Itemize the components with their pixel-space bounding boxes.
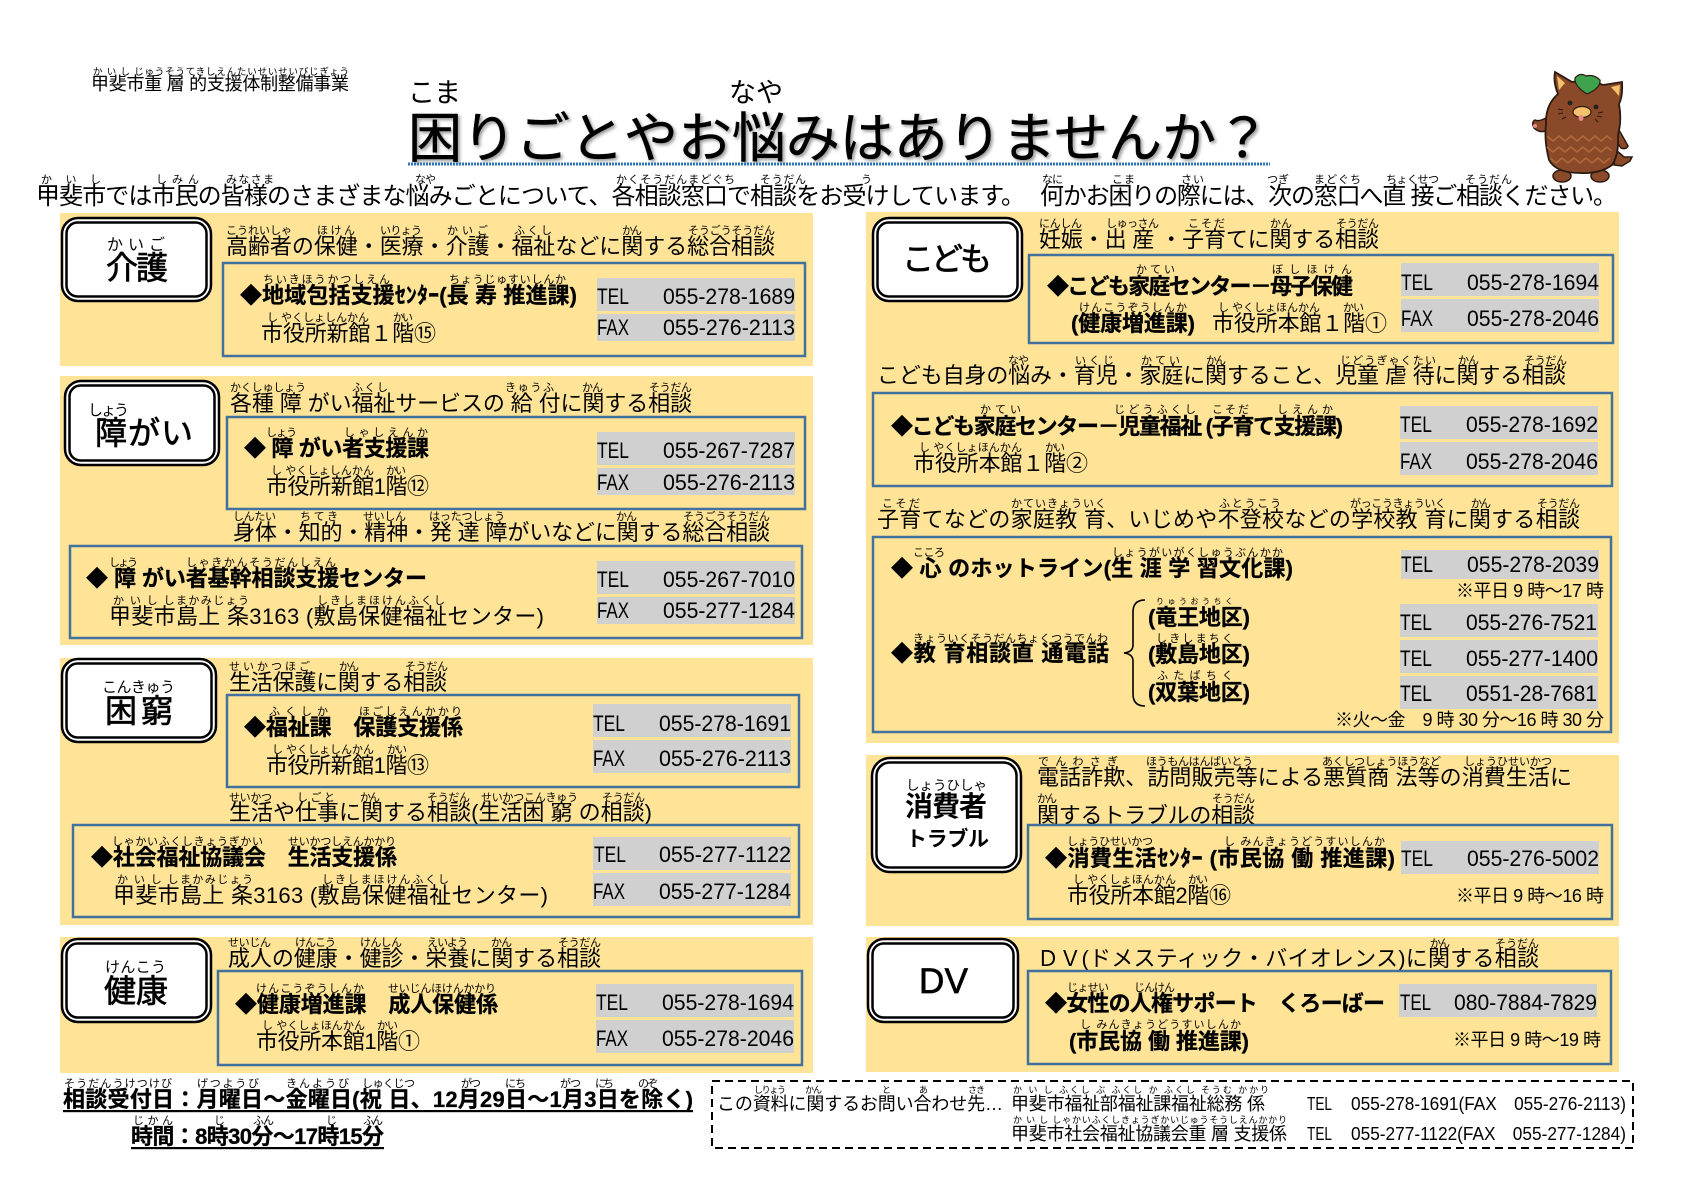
heading: 生活や仕事: せいかつこんきゅう: [481, 791, 578, 804]
box: 障がい者支援課: し やくしょしんかん: [271, 464, 374, 477]
box: 地域包括支援センター: かい: [393, 311, 413, 324]
box: こども家庭センター 児童福祉: TEL: [1400, 412, 1432, 437]
box: 障がい者支援課: TEL: [597, 438, 629, 463]
heading: DV description: そうだん: [1495, 937, 1539, 950]
heading: こども自身の悩み: かん: [1206, 354, 1226, 367]
inquiry box: あ: [919, 1085, 928, 1095]
box: 障がい者基幹相談支援センター: しゃきかんそうだんしえん: [186, 556, 336, 569]
heading: 障がい福祉サービス: 各種 障 がい福祉サービスの 給 付に関する相談: [230, 391, 692, 416]
heading: 介護 description: いりょう: [380, 224, 422, 237]
box: 障がい者基幹相談支援センター: 055-267-7010: [663, 567, 795, 592]
heading: 総合相談: しんたい: [233, 510, 276, 523]
box: 心のホットライン・教育相談直通電話: りゅうおうちく: [1156, 597, 1233, 606]
inquiry box: さき: [968, 1085, 985, 1095]
intro text: なに: [1042, 173, 1063, 186]
heading: こども自身の悩み: なや: [1008, 354, 1029, 367]
heading: 生活や仕事: しごと: [297, 790, 335, 804]
inquiry box: しりょう: [754, 1085, 786, 1095]
intro text: つぎ: [1267, 172, 1289, 186]
heading: DV description: かん: [1430, 937, 1450, 950]
box: 消費生活センター: ◆消費生活ｾﾝﾀｰ (市民協 働 推進課): [1045, 846, 1395, 871]
box: 心のホットライン・教育相談直通電話: (敷島地区): [1148, 642, 1250, 667]
box: 福祉課 保護支援係: 市役所新館1階⑬: [266, 753, 429, 778]
heading: 子育てなどの家庭教育: 子育てなどの家庭教 育、いじめや不登校などの学校教 育に関する相談: [877, 507, 1580, 532]
label: DV: [868, 939, 1018, 1022]
heading: 子育てなどの家庭教育: こそだ: [882, 497, 920, 510]
intro text: みなさま: [226, 173, 274, 186]
box: 消費生活センター: TEL: [1401, 846, 1433, 871]
box: こども家庭センター 児童福祉: FAX: [1400, 449, 1432, 474]
box: こども家庭センター 児童福祉: [873, 393, 1612, 486]
heading: 妊娠・出産: 妊娠・出 産 ・子育てに関する相談: [1039, 227, 1379, 252]
intro text: さい: [1181, 173, 1204, 186]
heading: 子育てなどの家庭教育: かん: [1471, 497, 1491, 510]
label: 困窮: こんきゅう: [102, 679, 175, 696]
box: こども家庭センター 母子保健: (健康増進課): [1071, 311, 1195, 336]
box: 障がい者支援課: 市役所新館1階⑫: [266, 474, 429, 499]
heading: 総合相談: [233, 509, 770, 545]
box: 地域包括支援センター: ちょうじゅすいしんか: [449, 273, 566, 286]
box: 障がい者基幹相談支援センター: FAX: [597, 598, 629, 623]
box: 障がい者支援課: かい: [386, 464, 406, 477]
box: 健康増進課 成人保健係: し やくしょほんかん: [262, 1019, 365, 1032]
icon: mascot: [1533, 72, 1632, 182]
box: 福祉課 保護支援係: TEL: [593, 711, 625, 736]
intro text: かくそうだんまどぐち: [616, 173, 735, 186]
label: こども: [873, 218, 1022, 301]
heading: 介護 description: 高齢者の保健・医療・介護・福祉などに関する総合相談: [226, 234, 775, 259]
intro text: まどぐち: [1314, 173, 1361, 186]
box: 心のホットライン・教育相談直通電話: ◆教 育相談直 通電話: [891, 641, 1109, 666]
reception days and hours: 相談受付日：月曜日～金曜日(祝 日、12月29日～1月3日を除く): [63, 1087, 693, 1112]
box: 障がい者支援課: 055-276-2113: [663, 470, 795, 495]
inquiry box: この資料に関するお問い合わせ先…: [717, 1094, 1003, 1114]
heading: 生活保護: そうだん: [405, 660, 448, 673]
intro text: [36, 172, 1617, 210]
panel: 健康: [60, 936, 813, 1073]
label: 健康: けんこう: [105, 959, 166, 976]
heading: 成人の健康: けんこう: [295, 936, 336, 949]
box: こども家庭センター 児童福祉: しえんか: [1277, 403, 1333, 416]
project name: 甲斐市重 層 的支援体制整備事業: [91, 74, 349, 94]
inquiry box: 甲斐市社会福祉協議会重 層 支援係: [1011, 1124, 1287, 1144]
box: 女性の人権サポート: ◆女性の人権サポート くろーばー: [1045, 991, 1385, 1016]
box: 健康増進課 成人保健係: TEL: [596, 990, 628, 1015]
box: 福祉課 保護支援係: ◆福祉課 保護支援係: [244, 715, 463, 740]
heading: 子育てなどの家庭教育: ふとうこう: [1219, 497, 1281, 510]
box: こども家庭センター 児童福祉: じどうふくし: [1114, 403, 1196, 416]
box: こども家庭センター 児童福祉: 055-278-2046: [1466, 449, 1598, 474]
box: 社会福祉協議会 生活支援係: 055-277-1122: [659, 842, 791, 867]
title: なや: [729, 78, 783, 108]
box: 女性の人権サポート: [1028, 971, 1611, 1064]
heading: 総合相談: 身体・知的・精神・発 達 障がいなどに関する総合相談: [233, 520, 770, 545]
box: 女性の人権サポート: 080-7884-7829: [1454, 990, 1597, 1015]
intro text: う: [861, 173, 872, 186]
box: 心のホットライン・教育相談直通電話: (竜王地区): [1148, 605, 1250, 630]
heading: 生活保護: せいかつほご: [229, 659, 310, 673]
label: 障がい: しょう: [88, 402, 129, 419]
box: 消費生活センター: かい: [1188, 873, 1208, 886]
inquiry box: 055-278-1691(FAX 055-276-2113): [1351, 1094, 1626, 1114]
heading: 介護 description: ほけん: [317, 224, 355, 237]
intro text: か い し: [41, 173, 101, 186]
box: 福祉課 保護支援係: 055-278-1691: [659, 711, 791, 736]
heading: 生活や仕事: かん: [360, 791, 380, 804]
heading: こども自身の悩み: かん: [1458, 354, 1479, 367]
box: 女性の人権サポート: じょせい: [1067, 981, 1109, 994]
label: 介護: かいご: [107, 236, 165, 254]
box: 障がい者基幹相談支援センター: 055-277-1284: [663, 598, 795, 623]
box: 地域包括支援センター: 055-276-2113: [663, 315, 795, 340]
box: 健康増進課 成人保健係: せいじんほけんかかり: [388, 982, 496, 995]
box: こども家庭センター 母子保健: ぼしほけん: [1272, 263, 1352, 276]
box: 健康増進課 成人保健係: けんこうぞうしんか: [256, 982, 364, 995]
reception days and hours: きんようび: [286, 1077, 349, 1090]
heading: 総合相談: ちてき: [300, 510, 338, 523]
box: こども家庭センター 母子保健: ◆こども家庭センター－母子保健: [1047, 274, 1353, 299]
box: こども家庭センター 母子保健: 055-278-1694: [1467, 270, 1599, 295]
box: こども家庭センター 母子保健: 055-278-2046: [1467, 306, 1599, 331]
panel: こども: [866, 212, 1619, 743]
heading: 介護 description: こうれいしゃ: [226, 224, 292, 237]
box: 福祉課 保護支援係: し やくしょしんかん: [272, 743, 374, 756]
heading: 悪質商法: そうだん: [1212, 792, 1255, 805]
inquiry box: TEL: [1307, 1094, 1332, 1114]
heading: 妊娠・出産: しゅっさん: [1106, 217, 1159, 230]
project name: か い し じゅうそうてきしえんたいせいせいびじぎょう: [93, 66, 349, 78]
box: 社会福祉協議会 生活支援係: しゃかいふくしきょうぎかい: [112, 834, 263, 848]
intro text: し み ん: [156, 173, 199, 186]
label: 障がい: 障がい: [95, 415, 193, 451]
panel: DV: [866, 937, 1619, 1072]
heading: 悪質商法: 関するトラブルの相談: [1037, 803, 1255, 828]
heading: 介護 description: かん: [622, 224, 642, 237]
box: こども家庭センター 児童福祉: こそだ: [1212, 403, 1249, 416]
heading: 妊娠・出産: かん: [1270, 217, 1292, 230]
heading: 悪質商法: でんわさぎ: [1038, 754, 1118, 768]
reception days and hours: じ: [214, 1114, 225, 1127]
box: 女性の人権サポート: ※平日 9 時～19 時: [1453, 1030, 1601, 1050]
label: 健康: 健康: [104, 973, 168, 1009]
panel: 消費者トラブル: [866, 754, 1619, 926]
box: こども家庭センター 母子保健: [1029, 255, 1613, 343]
inquiry box: か い し ふくし ぶ ふくし か ふくし そうむ かかり: [1013, 1085, 1269, 1095]
heading: 悪質商法: しょうひせいかつ: [1464, 755, 1552, 768]
inquiry box: 055-277-1122(FAX 055-277-1284): [1351, 1124, 1626, 1144]
reception days and hours: にち: [595, 1077, 614, 1090]
box: 福祉課 保護支援係: ほごしえんかかり: [359, 704, 462, 718]
box: 心のホットライン・教育相談直通電話: TEL: [1400, 681, 1432, 706]
label: 障がい: [65, 381, 219, 465]
heading: 障がい福祉サービス: きゅうふ: [505, 381, 554, 394]
intro text: なや: [415, 173, 436, 186]
box: 心のホットライン・教育相談直通電話: [873, 537, 1611, 732]
box: こども家庭センター 児童福祉: ◆こども家庭センター－児童福祉 (子育て支援課): [891, 414, 1343, 439]
box: 心のホットライン・教育相談直通電話: しきしまちく: [1156, 632, 1233, 645]
box: 地域包括支援センター: [223, 263, 805, 356]
box: 障がい者基幹相談支援センター: しょう: [109, 556, 138, 569]
box: 消費生活センター: し やくしょほんかん: [1073, 873, 1176, 886]
box: 健康増進課 成人保健係: FAX: [596, 1026, 628, 1051]
box: こども家庭センター 児童福祉: かてい: [980, 403, 1021, 416]
reception days and hours: にち: [505, 1077, 526, 1090]
inquiry box: TEL: [1307, 1124, 1332, 1144]
box: 障がい者基幹相談支援センター: 甲斐市島上 条3163 (敷島保健福祉センター): [109, 604, 544, 629]
reception days and hours: がつ: [461, 1076, 481, 1090]
heading: 子育てなどの家庭教育: [877, 496, 1580, 532]
box: 社会福祉協議会 生活支援係: しきしまほけんふくし: [322, 873, 449, 886]
box: 社会福祉協議会 生活支援係: [73, 825, 799, 917]
box: 社会福祉協議会 生活支援係: せいかつしえんかかり: [288, 835, 396, 848]
reception days and hours: 時間：8時30分～17時15分: [131, 1124, 384, 1149]
heading: 成人の健康: 成人の健康・健診・栄養に関する相談: [228, 946, 601, 971]
box: 健康増進課 成人保健係: 055-278-2046: [662, 1026, 794, 1051]
heading: 成人の健康: けんしん: [360, 936, 402, 949]
box: 福祉課 保護支援係: かい: [387, 743, 407, 756]
heading: こども自身の悩み: こども自身の悩み・育児・家庭に関すること、児童 虐 待に関する相談: [877, 363, 1566, 388]
reception days and hours: ふん: [363, 1114, 383, 1127]
box: こども家庭センター 母子保健: し やくしょほんかん: [1218, 301, 1320, 314]
box: 女性の人権サポート: (市民協 働 推進課): [1069, 1029, 1249, 1054]
box: 消費生活センター: [1028, 825, 1612, 919]
box: 社会福祉協議会 生活支援係: FAX: [593, 879, 625, 904]
box: 地域包括支援センター: TEL: [597, 284, 629, 309]
heading: DV description: ＤＶ(ドメスティック・バイオレンス)に関する相談: [1037, 946, 1539, 971]
box: 健康増進課 成人保健係: 市役所本館1階①: [256, 1029, 420, 1054]
heading: 総合相談: はったつしょう: [429, 510, 505, 523]
box: こども家庭センター 母子保健: かい: [1343, 301, 1364, 314]
box: 心のホットライン・教育相談直通電話: ※平日 9 時～17 時: [1456, 581, 1604, 601]
heading: 生活や仕事: そうだん: [602, 791, 645, 804]
heading: 介護 description: [226, 223, 775, 259]
box: 心のホットライン・教育相談直通電話: (双葉地区): [1148, 680, 1250, 705]
box: 障がい者基幹相談支援センター: ◆ 障 がい者基幹相談支援センター: [86, 566, 427, 591]
box: 心のホットライン・教育相談直通電話: ※火～金 9 時 30 分～16 時 30 分: [1335, 710, 1604, 730]
box: 健康増進課 成人保健係: ◆健康増進課 成人保健係: [235, 992, 498, 1017]
label: 消費者トラブル: トラブル: [906, 827, 989, 851]
reception days and hours: ふん: [253, 1114, 274, 1127]
box: 障がい者基幹相談支援センター: か い し しまかみじょう: [113, 594, 249, 607]
box: 障がい者支援課: しょう: [266, 426, 297, 439]
heading: 生活保護: [229, 659, 448, 695]
box: 女性の人権サポート: TEL: [1400, 990, 1431, 1015]
box: 消費生活センター: 055-276-5002: [1467, 846, 1599, 871]
heading: 障がい福祉サービス: かくしゅしょう: [230, 381, 306, 394]
box: 地域包括支援センター: ちいきほうかつしえん: [263, 273, 390, 286]
box: 心のホットライン・教育相談直通電話: TEL: [1400, 610, 1432, 635]
panel: 介護: [60, 213, 813, 366]
panel: 困窮: [60, 658, 813, 925]
heading: 介護 description: そうごうそうだん: [688, 223, 775, 237]
label: 消費者トラブル: [872, 758, 1021, 872]
intro text: 何かお困りの際には、次の窓口へ直 接ご相談ください。: [1040, 183, 1617, 210]
box: 地域包括支援センター: FAX: [597, 315, 629, 340]
label: 消費者トラブル: しょうひしゃ: [906, 778, 987, 793]
box: こども家庭センター 児童福祉: かい: [1045, 441, 1065, 454]
intro text: ちょくせつ: [1386, 173, 1439, 186]
box: 消費生活センター: し みんきょうどうすいしんか: [1224, 835, 1385, 848]
box: 社会福祉協議会 生活支援係: 055-277-1284: [659, 879, 791, 904]
box: 障がい者基幹相談支援センター: [70, 546, 802, 638]
title: こま: [408, 78, 461, 108]
heading: 生活や仕事: そうだん: [427, 791, 470, 804]
box: こども家庭センター 母子保健: TEL: [1401, 270, 1433, 295]
inquiry box: [712, 1081, 1633, 1148]
reception days and hours: そうだんうけつけび: [64, 1077, 172, 1090]
box: こども家庭センター 児童福祉: し やくしょほんかん: [919, 441, 1022, 454]
box: 障がい者支援課: FAX: [597, 470, 629, 495]
box: 心のホットライン・教育相談直通電話: ◆ 心 のホットライン(生 涯 学 習文化課): [891, 556, 1293, 581]
box: 心のホットライン・教育相談直通電話: しょうがいがくしゅうぶんかか: [1112, 545, 1283, 559]
heading: 子育てなどの家庭教育: がっこうきょういく: [1350, 496, 1446, 510]
box: 地域包括支援センター: し やくしょしんかん: [267, 311, 369, 324]
reception days and hours: じかん: [133, 1114, 173, 1127]
heading: 成人の健康: せいじん: [228, 936, 271, 949]
heading: 悪質商法: かん: [1037, 792, 1057, 805]
heading: 妊娠・出産: にんしん: [1039, 217, 1082, 230]
box: こども家庭センター 母子保健: かてい: [1136, 263, 1175, 276]
label: 介護: [62, 218, 211, 301]
reception days and hours: がつ: [560, 1076, 581, 1090]
heading: 悪質商法: 電話詐欺、訪問販売等による悪質商 法等の消費生活に: [1037, 765, 1572, 790]
box: 心のホットライン・教育相談直通電話: 055-276-7521: [1466, 610, 1597, 635]
heading: 成人の健康: そうだん: [558, 936, 601, 949]
heading: 総合相談: せいしん: [363, 510, 406, 523]
heading: 子育てなどの家庭教育: そうだん: [1537, 497, 1580, 510]
reception days and hours: しゅくじつ: [362, 1077, 415, 1090]
heading: 悪質商法: ほうもんはんばいとう: [1146, 755, 1253, 768]
box: 心のホットライン・教育相談直通電話: こころ: [913, 547, 945, 559]
heading: 悪質商法: あくしつしょうほうなど: [1322, 755, 1441, 768]
intro text: そうだん: [760, 173, 806, 186]
heading: 生活や仕事: 生活や仕事に関する相談(生活困 窮 の相談): [229, 800, 652, 825]
reception days and hours: じ: [326, 1114, 337, 1127]
box: 障がい者支援課: [227, 417, 805, 509]
intro text: そうだん: [1465, 173, 1512, 186]
heading: 介護 description: ふくし: [514, 224, 552, 237]
box: 心のホットライン・教育相談直通電話: 055-277-1400: [1466, 646, 1598, 671]
box: 女性の人権サポート: じんけん: [1134, 981, 1175, 994]
box: 心のホットライン・教育相談直通電話: TEL: [1401, 552, 1433, 577]
heading: 障がい福祉サービス: そうだん: [649, 381, 692, 394]
heading: 成人の健康: えいよう: [427, 936, 468, 949]
box: 健康増進課 成人保健係: かい: [377, 1019, 398, 1032]
box: 心のホットライン・教育相談直通電話: TEL: [1400, 646, 1432, 671]
inquiry box: か い し しゃかいふくしきょうぎかいじゅうそうしえんかかり: [1013, 1114, 1287, 1125]
heading: 総合相談: そうごうそうだん: [683, 509, 770, 523]
box: 障がい者支援課: しゃしえんか: [344, 426, 428, 439]
box: 消費生活センター: しょうひせいかつ: [1067, 835, 1153, 848]
heading: こども自身の悩み: そうだん: [1524, 354, 1567, 367]
reception days and hours: のぞ: [638, 1077, 658, 1090]
heading: 生活保護: 生活保護に関する相談: [229, 670, 447, 695]
label: 消費者トラブル: 消費者: [905, 791, 987, 822]
box: 社会福祉協議会 生活支援係: ◆社会福祉協議会 生活支援係: [91, 845, 397, 870]
heading: こども自身の悩み: いくじ: [1075, 354, 1114, 367]
box: こども家庭センター 母子保健: FAX: [1401, 306, 1433, 331]
heading: 妊娠・出産: そうだん: [1336, 217, 1379, 230]
label: 困窮: 困窮: [105, 693, 173, 729]
box: 地域包括支援センター: 市役所新館１階⑮: [261, 321, 436, 346]
box: 健康増進課 成人保健係: 055-278-1694: [662, 990, 794, 1015]
heading: 介護 description: かいご: [447, 223, 488, 237]
heading: 成人の健康: かん: [491, 936, 512, 949]
box: 心のホットライン・教育相談直通電話: ふたばちく: [1157, 669, 1233, 682]
box: 福祉課 保護支援係: ふくしか: [269, 705, 328, 718]
box: 消費生活センター: ※平日 9 時～16 時: [1456, 886, 1604, 906]
heading: 生活や仕事: せいかつ: [229, 791, 272, 804]
box: 健康増進課 成人保健係: [218, 971, 802, 1065]
intro text: こま: [1112, 173, 1135, 186]
box: 福祉課 保護支援係: 055-276-2113: [659, 746, 791, 771]
label: 健康: [62, 939, 211, 1022]
box: 心のホットライン・教育相談直通電話: 055-278-2039: [1467, 552, 1599, 577]
panel: 障がい: [60, 376, 813, 645]
heading: 総合相談: かん: [616, 510, 637, 523]
box: 地域包括支援センター: ◆地域包括支援ｾﾝﾀｰ(長 寿 推進課): [240, 283, 577, 308]
heading: 悪質商法: [1037, 754, 1572, 828]
box: 福祉課 保護支援係: FAX: [593, 746, 625, 771]
box: 障がい者基幹相談支援センター: TEL: [597, 567, 629, 592]
box: 地域包括支援センター: 055-278-1689: [663, 284, 795, 309]
reception days and hours: げつようび: [197, 1077, 259, 1090]
heading: こども自身の悩み: じどうぎゃくたい: [1340, 353, 1436, 367]
label: 介護: 介護: [106, 250, 168, 286]
box: 女性の人権サポート: し みんきょうどうすいしんか: [1080, 1018, 1241, 1031]
box: 障がい者基幹相談支援センター: しきしまほけんふくし: [317, 594, 445, 607]
label: 困窮: [62, 659, 216, 742]
title: [408, 78, 1270, 169]
box: こども家庭センター 児童福祉: 市役所本館１階②: [913, 451, 1088, 476]
box: こども家庭センター 児童福祉: 055-278-1692: [1466, 412, 1598, 437]
heading: 障がい福祉サービス: ふくし: [352, 381, 388, 394]
label: DV: DV: [919, 962, 969, 1001]
heading: こども自身の悩み: かてい: [1141, 354, 1180, 367]
box: 社会福祉協議会 生活支援係: か い し しまかみじょう: [117, 873, 253, 886]
box: 障がい者支援課: 055-267-7287: [663, 438, 795, 463]
heading: 障がい福祉サービス: かん: [582, 381, 603, 394]
box: 社会福祉協議会 生活支援係: TEL: [594, 842, 626, 867]
inquiry box: と: [882, 1085, 891, 1095]
heading: 生活保護: かん: [339, 660, 359, 673]
box: 心のホットライン・教育相談直通電話: 0551-28-7681: [1466, 681, 1597, 706]
box: 心のホットライン・教育相談直通電話: きょういくそうだんちょくつうでんわ: [913, 632, 1108, 645]
reception days and hours: [63, 1076, 693, 1149]
label: こども: こども: [902, 241, 992, 277]
title: 困りごとやお悩みはありませんか？: [408, 109, 1270, 169]
box: 障がい者支援課: ◆ 障 がい者支援課: [244, 436, 429, 461]
box: 福祉課 保護支援係: [227, 695, 799, 787]
intro text: 甲斐市では市民の皆様のさまざまな悩みごとについて、各相談窓口で相談をお受けしています。: [36, 182, 1025, 210]
inquiry box: 甲斐市福祉部福祉課福祉総務 係: [1011, 1094, 1265, 1114]
box: こども家庭センター 母子保健: けんこうぞうしんか: [1079, 301, 1187, 314]
heading: 子育てなどの家庭教育: かていきょういく: [1011, 497, 1106, 510]
box: こども家庭センター 母子保健: 市役所本館１階①: [1212, 311, 1387, 336]
box: 消費生活センター: 市役所本館2階⑯: [1067, 883, 1231, 908]
inquiry box: かん: [805, 1085, 822, 1095]
box: 社会福祉協議会 生活支援係: 甲斐市島上 条3163 (敷島保健福祉センター): [113, 883, 548, 908]
heading: 妊娠・出産: こそだ: [1188, 217, 1225, 230]
